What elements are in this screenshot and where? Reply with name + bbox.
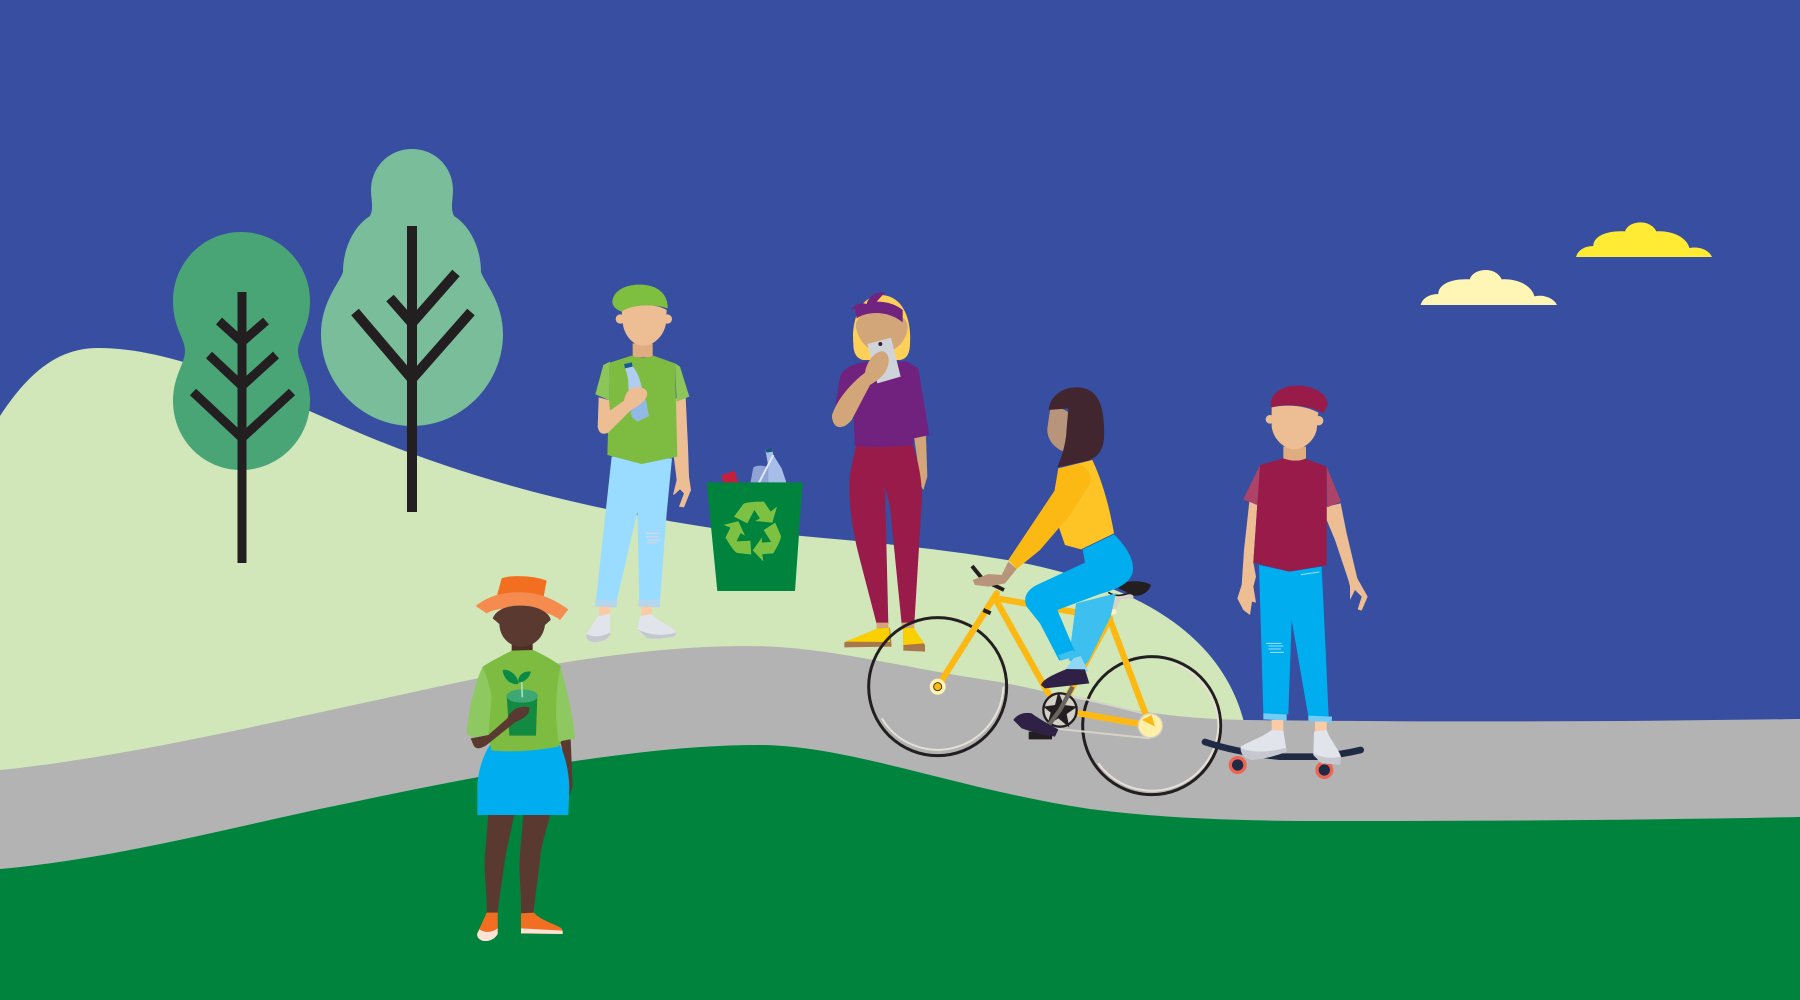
shirt — [607, 356, 677, 464]
chainring — [1043, 692, 1077, 727]
tree: round dark green — [173, 232, 310, 563]
shirt — [1253, 458, 1327, 572]
saddle — [1118, 581, 1151, 596]
cap — [612, 285, 668, 312]
pot with seedling — [503, 670, 538, 736]
right arm — [559, 739, 573, 795]
ears — [1266, 415, 1323, 425]
arm holding pot — [471, 707, 529, 748]
neck — [512, 640, 533, 653]
right shoe — [637, 614, 676, 639]
person: skateboarder — [1205, 386, 1368, 777]
person: woman with hat holding seedling — [467, 576, 575, 941]
phone — [867, 338, 901, 383]
left shoe — [477, 913, 498, 941]
sleeves — [1243, 465, 1341, 507]
bin body — [707, 482, 803, 591]
ears and face — [856, 313, 908, 353]
ankles — [877, 623, 914, 629]
left arm and hand — [598, 387, 647, 434]
sleeves — [467, 666, 575, 742]
can — [721, 471, 738, 483]
right shoe — [521, 913, 563, 934]
arm and hand — [832, 351, 889, 427]
hair — [853, 295, 910, 360]
cap — [1271, 386, 1328, 413]
person: cyclist woman — [973, 387, 1133, 737]
cup — [750, 466, 769, 483]
trousers — [596, 457, 672, 601]
left shoe — [586, 613, 610, 642]
sleeve — [1008, 464, 1091, 569]
trousers — [849, 444, 922, 624]
face — [622, 305, 667, 346]
face — [1272, 406, 1318, 449]
cloud: pale yellow — [1421, 270, 1557, 305]
jeans tear — [1266, 572, 1319, 652]
shirt — [483, 650, 564, 751]
bottle — [765, 447, 787, 483]
head and hair — [493, 606, 551, 647]
right shoe — [1313, 730, 1341, 764]
saddle clamp — [1108, 592, 1130, 595]
cuffs — [1263, 713, 1332, 723]
cuff — [1058, 650, 1076, 661]
hair — [1049, 387, 1104, 467]
bottle — [624, 362, 649, 422]
torso — [1047, 460, 1114, 549]
right arm — [914, 436, 927, 490]
face — [1047, 408, 1072, 452]
person: man with green cap and bottle — [586, 285, 691, 642]
lower shoe — [1013, 713, 1058, 737]
cloud: bright yellow — [1576, 222, 1712, 257]
hat crown — [497, 576, 547, 598]
left arm — [1237, 502, 1257, 615]
light green hill — [0, 348, 1244, 900]
tree: tall light green — [321, 149, 503, 512]
pedal — [1029, 732, 1052, 739]
recycling symbol — [720, 502, 787, 564]
ankles — [599, 607, 652, 616]
top — [835, 362, 929, 447]
rear hub — [1138, 714, 1162, 738]
chain — [1053, 693, 1150, 738]
legs — [485, 815, 550, 913]
hat brim — [476, 592, 568, 620]
front wheel — [869, 618, 1007, 756]
ankles — [1272, 720, 1327, 732]
crank arm — [1045, 687, 1073, 730]
grey road — [0, 646, 1800, 900]
skirt — [477, 745, 569, 815]
neck — [633, 343, 653, 357]
jeans — [1259, 565, 1329, 717]
rear leg — [1069, 593, 1116, 668]
trouser tear — [646, 533, 661, 543]
headset clamp — [983, 610, 991, 613]
frame — [938, 593, 1150, 726]
bandana — [851, 292, 903, 322]
straw — [759, 455, 773, 483]
recycling bin — [707, 447, 803, 591]
right arm — [673, 397, 691, 507]
far seat post — [1112, 597, 1133, 613]
sleeves — [595, 362, 689, 402]
dark green foreground — [0, 745, 1800, 1000]
shoes — [844, 628, 925, 652]
upper shoe — [1041, 669, 1089, 688]
neck — [1283, 447, 1306, 461]
trouser cuffs — [595, 600, 660, 607]
ears — [616, 314, 672, 324]
front hub — [930, 679, 946, 695]
handlebar — [972, 566, 1004, 590]
right arm — [1327, 503, 1368, 611]
skateboard — [1205, 742, 1361, 777]
rear sock — [1063, 656, 1088, 673]
rear wheel — [1083, 657, 1221, 795]
left shoe — [1241, 730, 1287, 760]
hand on handlebar — [973, 562, 1017, 587]
bicycle — [869, 566, 1221, 795]
person: woman with blonde hair and phone — [832, 292, 929, 652]
front leg — [1025, 534, 1133, 661]
